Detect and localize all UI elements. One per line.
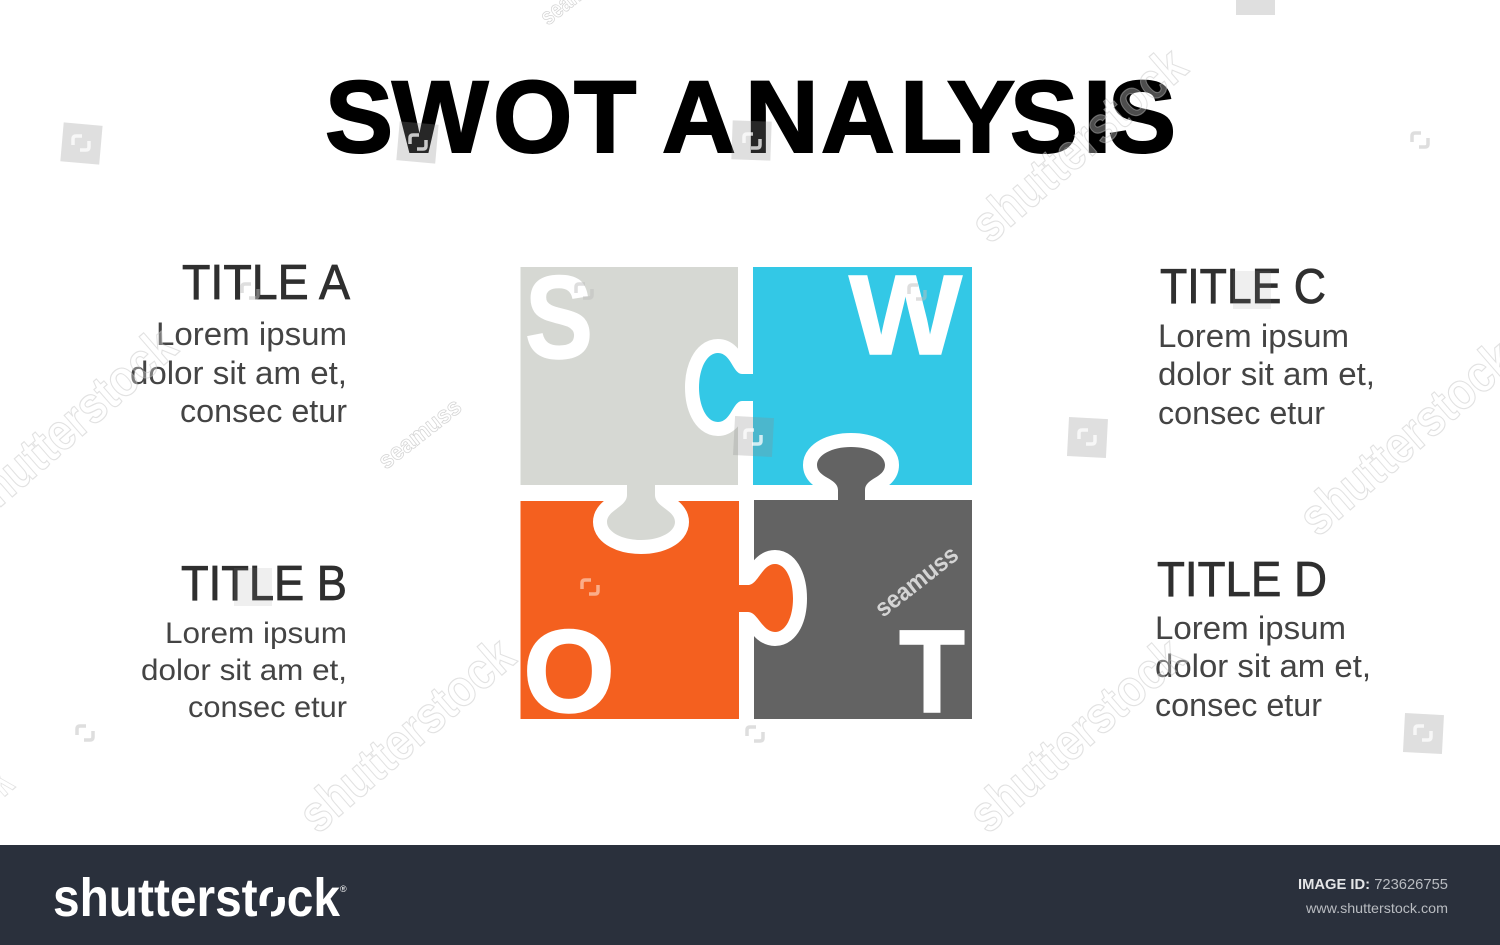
text block: title B: dolor sit am et, [141, 654, 347, 687]
text block: title D [1155, 553, 1371, 723]
text block: title A: Lorem ipsum [156, 316, 347, 352]
letter W: W [849, 252, 962, 378]
text block: title D: dolor sit am et, [1155, 648, 1371, 684]
watermarks: shutterstock [288, 626, 526, 844]
puzzle piece: S grey [520, 267, 738, 485]
text block: title A: dolor sit am et, [130, 355, 347, 391]
text block: title A: TITLE A [182, 256, 350, 310]
website: www.shutterstock.com [1305, 900, 1448, 916]
puzzle piece: O orange knob [737, 564, 793, 632]
text block: title D: Lorem ipsum [1155, 610, 1346, 646]
text block: title D: TITLE D [1157, 553, 1327, 607]
logo notch: bottom left of o [259, 906, 271, 919]
letter O: O [523, 606, 615, 738]
watermarks: shutterstock [960, 36, 1198, 254]
text block: title C [1158, 260, 1375, 431]
footer bar [0, 845, 1500, 945]
registered mark: ® [340, 884, 347, 894]
text block: title D: consec etur [1155, 687, 1322, 723]
image id: IMAGE ID: 723626755 [1298, 876, 1448, 893]
text block: title B: TITLE B [181, 557, 347, 611]
text block: title A: consec etur [180, 393, 347, 429]
text block: title A [130, 256, 350, 429]
puzzle piece: S grey knob [607, 483, 675, 540]
text block: title B [141, 557, 347, 724]
text block: title B: consec etur [188, 691, 347, 724]
letter T: T [899, 606, 965, 738]
puzzle piece: W blue knob [699, 353, 755, 422]
text block: title C: consec etur [1158, 395, 1325, 431]
letter S: S [525, 252, 593, 384]
text block: title C: TITLE C [1160, 260, 1326, 314]
puzzle piece: T dark knob [817, 447, 885, 502]
text block: title C: dolor sit am et, [1158, 356, 1375, 392]
watermarks: seamuss [869, 540, 964, 623]
footer logo: shutterstock [53, 868, 341, 928]
text block: title B: Lorem ipsum [165, 617, 347, 650]
puzzle piece: T dark [754, 500, 972, 719]
grey patch over knob base [595, 462, 687, 485]
title: SWOT ANALYSIS [325, 60, 1176, 174]
watermarks: seamuss [373, 393, 467, 475]
SWOT puzzle [520, 252, 972, 738]
puzzle piece: W blue [753, 267, 972, 485]
watermarks: shutterstock [958, 626, 1196, 844]
logo notch: top right of o [273, 884, 286, 897]
puzzle piece: O orange [520, 501, 739, 719]
text block: title C: Lorem ipsum [1158, 318, 1349, 354]
